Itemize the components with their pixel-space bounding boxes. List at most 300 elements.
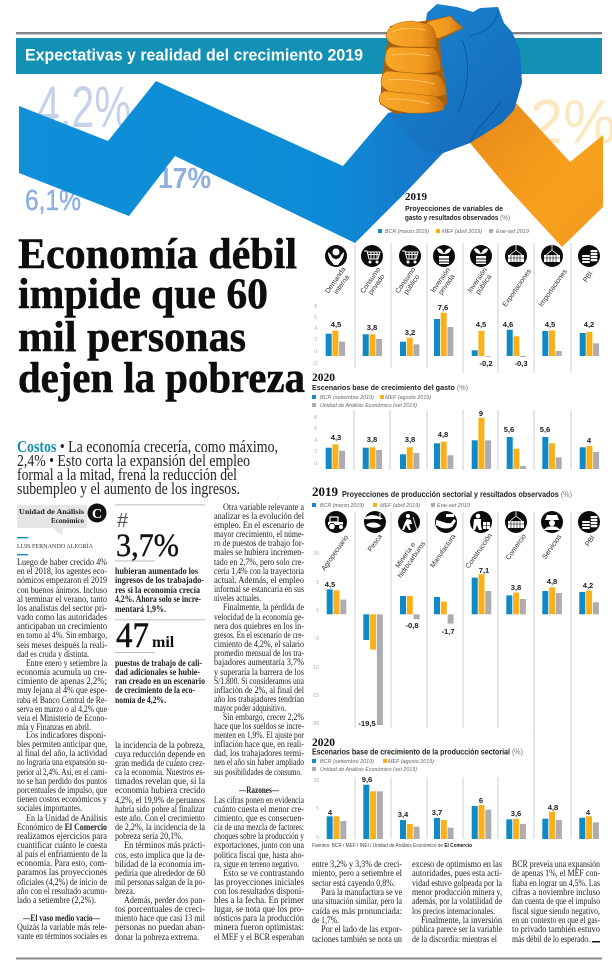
chart header: 2020 producción sectorial: [312, 737, 523, 773]
illustration numbers behind arrows: 4,2%: [37, 75, 131, 140]
column: Agropecuario: [321, 511, 350, 614]
text column 2: cuya reducción depende en: [115, 750, 205, 760]
text column 2: 4,2%, el 19,9% de peruanos: [115, 796, 205, 806]
chart header: 2020 producción sectorial: 2020: [312, 737, 335, 749]
text column 3: menten en 1,9%. El ajuste por: [214, 731, 305, 741]
column: Consumo privado 2020: [363, 435, 382, 469]
text column 1: En la Unidad de Análisis: [26, 814, 107, 824]
column dividers: [355, 512, 571, 735]
column: Servicios 2020: 4,8: [548, 803, 558, 812]
column: Consumo privado 2020: 3,8: [367, 435, 377, 444]
axis labels: [313, 778, 319, 841]
text column 1: mía y Finanzas en abril.: [17, 723, 91, 733]
column: Consumo público 2020: [400, 435, 419, 469]
column: Inversión privada: [430, 245, 458, 356]
text column 3: nen el año sin haber ampliado: [214, 758, 304, 768]
column: Inversión privada: 7,6: [438, 303, 448, 312]
column: Exportaciones: -0,3: [514, 359, 528, 368]
text column 3: actual. Además, el empleo: [214, 576, 304, 586]
column: Inversión pública: pública: [475, 274, 493, 296]
text column 3: Sin embargo, crecer 2,2%: [223, 713, 304, 723]
column: Inversión privada: Inversión: [430, 267, 452, 294]
axis labels: 5: [316, 806, 319, 812]
text column 1: con buenos ánimos. Incluso: [17, 586, 107, 596]
column: Manufactura: [429, 511, 457, 636]
column: Inversión pública: [467, 245, 495, 368]
text column 1: porcentuales de impulso, que: [17, 786, 107, 796]
byline: LUIS FERNANDO ALEGRÍA: [17, 542, 94, 550]
subheading: formal a la mitad, frena la reducción del: [17, 465, 237, 484]
text column 1: anticipaban un crecimiento: [17, 622, 107, 632]
column: PBI 2020: [580, 436, 599, 469]
band title: Expectativas y realidad del crecimiento 2019: [25, 46, 363, 64]
key figure text: dad adicionales se hubie-: [115, 668, 200, 678]
column: Pesca: [358, 511, 386, 728]
text column 3: política fiscal que, hasta aho-: [214, 850, 304, 861]
column: Minería e hidrocarburos: Minería e: [395, 542, 417, 570]
text column 3: nósticos para la producción: [214, 914, 304, 924]
text column 1: lado a setiembre (2,2%).: [17, 895, 96, 906]
text column 1: en el 2018, los agentes eco-: [17, 567, 107, 577]
sources note: Fuentes: BCR / MEF / INEI / Unidad de Análisis Económico de El Comercio: [312, 843, 472, 849]
chart header: 2019 gasto: Proyecciones de variables de: [405, 204, 503, 213]
text column 2: [115, 741, 206, 943]
column: Pesca 2020: 9,6: [362, 775, 372, 784]
column: PBI: [578, 245, 600, 356]
text column 1: dad es cruda y distinta.: [17, 650, 89, 660]
column: Construcción: 7,1: [479, 566, 490, 575]
column: Pesca: -19,5: [358, 719, 376, 728]
axis labels: 6: [314, 315, 317, 321]
text column 1: cuantificar cuánto le cuesta: [17, 840, 108, 851]
key figure text: ingresos de los trabajado-: [115, 576, 204, 586]
axis labels: -5: [315, 636, 319, 642]
column: Construcción: [465, 511, 494, 614]
axis labels: 0: [314, 349, 317, 355]
column: Comercio: 3,8: [511, 583, 521, 592]
text column 3: gresos. En el escenario de cre-: [214, 631, 304, 641]
text column 6: to privado también estuvo: [512, 925, 600, 935]
text column 2: mil personas salgan de la po-: [115, 878, 205, 888]
axis labels: 2: [314, 449, 317, 455]
column: Inversión pública: Inversión: [467, 267, 489, 294]
text column 4: sector está cayendo 0,8%.: [312, 879, 395, 889]
author tag: Unidad de Análisis Económico: C: [92, 507, 102, 522]
main headline: Economía débil: [18, 231, 297, 278]
chart header: 2019 gasto: gasto y resultados observados (%): [405, 213, 510, 222]
text column 1: al final del año, la actividad: [17, 748, 107, 759]
column: Consumo público: 3,2: [405, 328, 415, 337]
text column 3: cimiento, que es consecuen-: [214, 814, 304, 824]
column: Comercio 2020: [506, 809, 526, 839]
column: Demanda interna: Demanda: [324, 266, 348, 295]
key figure: 47 mil: [115, 615, 205, 706]
author tag: Unidad de Análisis Económico: Económico: [51, 517, 84, 525]
orange arm arrow: [470, 103, 603, 247]
text column 4: de 1,7%.: [312, 916, 339, 926]
text column 2: ca la economía. Nuestros es-: [115, 768, 205, 778]
text column 3: Finalmente, la pérdida de: [223, 603, 304, 613]
text column 1: tienen costos económicos y: [17, 795, 107, 805]
column: Agropecuario: Agropecuario: [321, 534, 350, 572]
byline: [17, 537, 94, 555]
text column 3: velocidad de la economía ge-: [214, 613, 304, 623]
bottom rule: [16, 958, 602, 960]
text column 1: Los indicadores disponi-: [26, 731, 106, 741]
illustration numbers behind arrows: [25, 75, 612, 217]
chart: 2019 producción sectorial: [312, 511, 600, 735]
legend: [312, 759, 434, 773]
column: Manufactura 2020: [432, 808, 454, 839]
text column 5: [412, 860, 503, 945]
text column 3: cimiento de 4,2%, el salario: [214, 640, 304, 650]
text column 1: bles permiten anticipar que,: [17, 740, 107, 750]
column: Pesca: Pesca: [367, 533, 384, 553]
finger shading: [386, 28, 435, 104]
hand creases: [458, 10, 502, 143]
text column 2: breza.: [115, 887, 135, 897]
illustration numbers behind arrows: 6,1%: [25, 185, 81, 217]
text column 1: economía acumula un cre-: [17, 668, 107, 678]
text column 5: autoridades, pues esta acti-: [412, 869, 502, 879]
axis labels: -10: [312, 665, 319, 671]
column: Servicios: 4,8: [547, 577, 557, 586]
column dividers: [355, 243, 571, 373]
text column 1: seis meses después la reali-: [17, 641, 107, 651]
text column 2: gran medida de cuánto crez-: [115, 759, 205, 769]
text column 1: año con el resultado acumu-: [17, 887, 107, 897]
text column 3: [214, 503, 305, 943]
legend: Unidad de Análisis Económico (set 2019): [320, 403, 417, 409]
text column 3: nera dos quiebres en los in-: [214, 622, 304, 632]
column: PBI sectorial 2020: [579, 808, 599, 839]
column: Demanda interna 2020: 4,3: [331, 433, 341, 442]
text column 3: minera fueron optimistas:: [214, 922, 304, 933]
column: Exportaciones: [502, 245, 533, 368]
chart header: 2019 gasto: [378, 191, 529, 235]
text column 1: perior al 2,4%. Así, en el cami-: [17, 768, 107, 778]
text column 3: mayor poder adquisitivo.: [214, 704, 286, 714]
chart: 2020 gasto: [314, 409, 599, 470]
column: Importaciones: Importaciones: [538, 268, 569, 308]
legend: BCR (setiembre 2019): [320, 759, 374, 765]
text column 1: vado como las autoridades: [17, 613, 107, 623]
text column 3: sus posibilidades de consumo.: [214, 768, 302, 778]
column: Construcción 2020: [472, 796, 491, 839]
text column 4: caída es más pronunciada:: [312, 907, 402, 917]
text column 3: año los trabajadores tendrían: [214, 695, 304, 705]
column: Demanda interna: [324, 245, 354, 356]
column: Minería e hidrocarburos: -0,8: [405, 621, 419, 630]
legend: MEF (agosto 2019): [388, 759, 434, 765]
column dividers: [355, 730, 571, 839]
text column 1: cimiento de apenas 2,2%;: [17, 677, 107, 687]
text column 1: sociales importantes.: [17, 804, 82, 814]
text column 3: promedio mensual de los tra-: [214, 649, 304, 659]
legend: MEF (agosto 2019): [385, 395, 431, 401]
key figure text: de crecimiento de la eco-: [115, 686, 195, 696]
column: Agropecuario 2020: [327, 808, 346, 839]
text column 5: de la discordia: mientras el: [412, 935, 497, 945]
text column 5: los precios internacionales.: [412, 907, 495, 917]
text column 3: cia de una mezcla de factores:: [214, 822, 304, 833]
column: Exportaciones 2020: [504, 425, 526, 469]
text column 4: miento, pero a setiembre el: [312, 869, 402, 879]
key figure text: hubieran aumentado los: [115, 567, 198, 577]
text column 3: bajadores aumentaría 3,7%: [214, 658, 304, 668]
column: Agropecuario 2020: 4: [328, 808, 333, 817]
text column 4: una situación similar, pero la: [312, 897, 403, 907]
axis labels: 0: [314, 461, 317, 467]
text column 1: realizamos ejercicios para: [17, 832, 108, 842]
text column 3: ro de puestos de trabajo for-: [214, 538, 304, 549]
text column 2: miento hace que casi 13 mil: [115, 914, 205, 924]
column: Consumo privado: [359, 245, 389, 356]
legend: MEF (abril 2019): [442, 229, 482, 235]
text column 2: este año. Con el crecimiento: [115, 814, 205, 824]
chart: 2019 variables de gasto: [313, 243, 600, 373]
column: Importaciones 2020: 5,6: [540, 425, 550, 434]
column: Pesca 2020: [362, 775, 383, 839]
text column 3: dad, los trabajadores termi-: [214, 749, 304, 759]
text column 4: entre 3,2% y 3,3% de creci-: [312, 860, 402, 870]
main headline: mil personas: [18, 314, 246, 361]
text column 2: personas no puedan aban-: [115, 923, 205, 933]
text column 2: habría sido pobre al finalizar: [115, 804, 206, 815]
text column 1: serva en marzo o al 4,2% que: [17, 705, 107, 715]
text column 1: nómicos empezaron el 2019: [17, 576, 107, 586]
axis labels: 10: [313, 778, 319, 784]
text column 1: raba el Banco Central de Re-: [17, 696, 107, 706]
column: Importaciones: 4,5: [545, 320, 556, 329]
text column 2: economía hubiera crecido: [115, 786, 205, 796]
key figure: 47 mil: mil: [152, 634, 175, 651]
El Comercio logo: [88, 504, 106, 522]
text column 2: Además, perder dos pun-: [124, 896, 205, 906]
column: Importaciones 2020: [540, 425, 562, 469]
column dividers: [354, 410, 571, 470]
column: Minería 2020: 3,4: [398, 810, 409, 819]
key figure text: res si la economía crecía: [115, 586, 200, 596]
text column 1: no lograría una expansión su-: [17, 758, 107, 768]
column: PBI sectorial: [578, 511, 600, 614]
legend: [312, 395, 431, 409]
text column 1: Entre enero y setiembre la: [26, 659, 108, 669]
chart header: 2019 producción sectorial: 2019: [312, 484, 338, 499]
axis labels: 10: [313, 551, 319, 557]
column: Consumo privado: privado: [368, 273, 387, 296]
text column 2: donar la pobreza extrema.: [115, 933, 199, 943]
text column 1: paramos las proyecciones: [17, 868, 107, 878]
illustration numbers behind arrows: 17%: [158, 163, 211, 195]
text column 3: con los resultados disponi-: [214, 887, 304, 897]
axis labels: 0: [316, 608, 319, 614]
legend: BCR (marzo 2019): [320, 503, 364, 509]
chart header: 2020 gasto: [312, 372, 468, 409]
key figure text: [115, 659, 205, 706]
column: Servicios 2020: [542, 803, 562, 839]
column: Inversión privada 2020: [434, 430, 453, 469]
text column 4: Por el lado de las expor-: [321, 925, 402, 935]
column: Inversión pública: -0,2: [479, 359, 493, 368]
key figure text: puestos de trabajo de cali-: [115, 659, 202, 669]
text column 6: [512, 860, 600, 945]
author tag: Unidad de Análisis Económico: [17, 504, 106, 536]
subheading: subempleo y el aumento de los ingresos.: [17, 479, 240, 498]
orange fingers: [379, 16, 463, 113]
axis labels: -15: [312, 693, 319, 699]
column: Comercio 2020: 3,6: [511, 809, 521, 818]
text column 3: empleo. En el escenario de: [214, 521, 304, 531]
column: Consumo privado: Consumo: [359, 266, 382, 295]
text column 2: pediría que alrededor de 60: [115, 869, 205, 879]
text column 1: al terminar el verano, tanto: [17, 595, 107, 605]
text column 1: al país el enfriamiento de la: [17, 849, 108, 860]
text column 3: exportaciones, junto con una: [214, 841, 305, 851]
key figure: 3,7%: #: [117, 510, 129, 532]
text column 3: analizar es la evolución del: [214, 512, 304, 522]
axis labels: 5: [316, 580, 319, 586]
column: Consumo público: Consumo: [394, 266, 417, 295]
key figure: 47 mil: 47: [116, 615, 149, 655]
column: Servicios: [541, 511, 564, 614]
text column 3: informal se estancaría en sus: [214, 584, 304, 595]
column: Exportaciones: 4,6: [503, 320, 513, 329]
column: PBI: 4,2: [584, 320, 594, 329]
text column 1: Luego de haber crecido 4%: [17, 558, 107, 568]
text column 2: la incidencia de la pobreza,: [115, 741, 205, 751]
text column 2: cos, esto implica que la de-: [115, 851, 205, 861]
finger backing: [380, 16, 463, 114]
text column 3: Las cifras ponen en evidencia: [214, 795, 305, 806]
legend: MEF (abril 2019): [380, 503, 420, 509]
axis labels: 6: [314, 426, 317, 432]
column: Consumo público 2020: 3,8: [405, 435, 415, 444]
column: Demanda interna 2020: [326, 433, 345, 469]
key figure: 3,7%: [115, 504, 205, 615]
chart header: 2020 gasto: 2020: [312, 372, 335, 384]
chart: 2020 producción sectorial: [313, 730, 599, 841]
text column 3: inflación hace que, en reali-: [214, 739, 304, 750]
column: PBI: PBI: [582, 271, 595, 284]
text column 3: hace que los sueldos se incre-: [214, 722, 304, 732]
legend: Unidad de Análisis Económico (set 2019): [320, 767, 417, 773]
text column 1: [17, 558, 108, 942]
subheading: 2,4% • Esto corta la expansión del empleo: [17, 451, 250, 470]
legend: [312, 503, 470, 509]
column: Importaciones: [538, 245, 569, 356]
text column 3: niveles actuales.: [214, 594, 261, 604]
chart header: 2020 gasto: Escenarios base de crecimiento del gasto (%): [312, 383, 468, 392]
key figure: 3,7%: 3,7%: [116, 528, 179, 564]
column: PBI sectorial: 4,2: [583, 581, 593, 590]
column: Inversión pública: 4,5: [476, 320, 487, 329]
illustration: arm wrestling arrows: [19, 4, 603, 247]
axis labels: [313, 304, 317, 367]
text column 3: —Razones—: [238, 786, 279, 796]
text column 1: los analistas del sector pri-: [17, 604, 107, 614]
header rule and band: [16, 32, 602, 74]
text column 5: pública parece ser la variable: [412, 925, 502, 935]
column: Comercio: [505, 511, 528, 614]
axis labels: 8: [314, 304, 317, 310]
column: Comercio: Comercio: [505, 533, 528, 562]
chart header: 2019 gasto: 2019: [405, 191, 428, 203]
column: Manufactura: -1,7: [441, 627, 455, 636]
column: Servicios: Servicios: [541, 533, 564, 561]
text column 3: mayor crecimiento, el núme-: [214, 530, 304, 540]
text column 3: Esto se ve contrastando: [223, 869, 304, 879]
text column 3: cuánto cuesta el menor cre-: [214, 805, 304, 815]
axis labels: -2: [313, 361, 317, 367]
text column 1: muy lejana al 4% que espe-: [17, 686, 107, 696]
text column 5: además, por la volatilidad de: [412, 897, 502, 907]
text column 1: en torno al 4%. Sin embargo,: [17, 631, 107, 641]
text column 2: bilidad de la economía im-: [115, 860, 205, 870]
column: Inversión pública 2020: [472, 409, 491, 469]
column: Manufactura 2020: 3,7: [432, 808, 442, 817]
text column 5: exceso de optimismo en las: [412, 860, 502, 870]
column: Exportaciones: Exportaciones: [502, 268, 533, 308]
legend: BCR (marzo 2019): [385, 229, 429, 235]
column: Inversión privada: privada: [438, 273, 457, 296]
chart header: 2019 producción sectorial: [312, 484, 572, 509]
main headline: dejen la pobreza: [18, 355, 305, 402]
text column 3: inflación de 2%, al final del: [214, 685, 304, 696]
column: Minería 2020: [398, 810, 420, 839]
key figure text: ran creado en un escenario: [115, 677, 205, 687]
legend: Ene-set 2019: [437, 503, 470, 509]
text column 3: las proyecciones iniciales: [214, 878, 304, 888]
text column 1: veía el Ministerio de Econo-: [17, 714, 107, 724]
axis labels: 4: [314, 326, 317, 332]
column: Minería e hidrocarburos: [391, 511, 428, 630]
text column 4: Para la manufactura se ve: [321, 887, 402, 898]
column: PBI sectorial: PBI: [584, 535, 597, 548]
axis labels: 8: [314, 415, 317, 421]
subheading: [17, 437, 278, 498]
text column 3: y superaría la barrera de los: [214, 668, 304, 678]
axis labels: 0: [316, 835, 319, 841]
text column 2: timados revelan que, si la: [115, 777, 206, 787]
text column 5: vidad estuvo golpeada por la: [412, 879, 503, 889]
column: Construcción: Construcción: [465, 532, 494, 570]
text column 1: vante en términos sociales es: [17, 932, 107, 942]
text column 6: más débil de lo esperado.: [512, 935, 590, 945]
key figure text: [115, 567, 204, 615]
subheading: Costos • La economía crecería, como máximo,: [17, 437, 278, 456]
main headline: impide que 60: [18, 271, 268, 318]
column: PBI sectorial 2020: 4: [586, 808, 591, 817]
key figure text: mentará 1,9%.: [115, 605, 166, 615]
text column 3: Otra variable relevante a: [223, 503, 305, 513]
column: Minería e hidrocarburos: hidrocarburos: [397, 540, 428, 579]
text column 2: En términos más prácti-: [124, 841, 205, 851]
text column 4: taciones también se nota un: [312, 935, 402, 945]
column: Consumo público: público: [403, 274, 421, 296]
text column 1: economía. Para esto, com-: [17, 859, 107, 869]
column: Consumo público: [394, 245, 424, 356]
main headline: [18, 231, 305, 402]
text column 5: menor producción minera y,: [412, 888, 502, 898]
text column 6: cifras a noviembre incluso: [512, 887, 600, 898]
text column 3: bles a la fecha. En primer: [214, 895, 305, 906]
text column 2: pobreza sería 20,1%.: [115, 832, 183, 842]
text column 3: lugar, se nota que los pro-: [214, 905, 304, 915]
text column 1: —El vaso medio vacío—: [22, 914, 100, 924]
column: Manufactura: Manufactura: [429, 533, 457, 569]
axis labels: [314, 415, 317, 467]
